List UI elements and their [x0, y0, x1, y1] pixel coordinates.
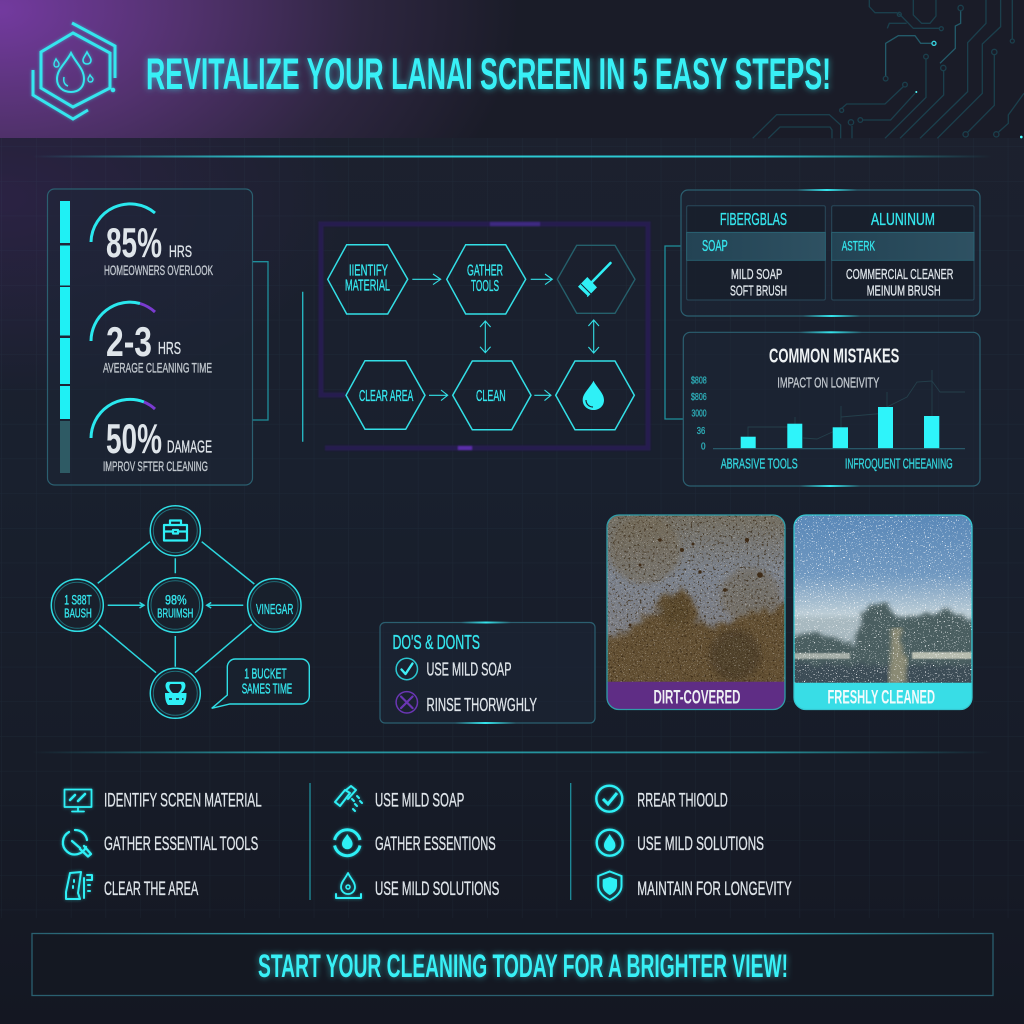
- table column: aluminum: ASTERK: [842, 238, 875, 254]
- bars: [741, 407, 939, 448]
- stat: 50 percent: IMPROV SFTER CLEANING: [103, 458, 208, 474]
- caption text: dirt-covered: DIRT-COVERED: [654, 687, 740, 708]
- node: soft brush: BAUSH: [64, 606, 92, 620]
- checklist column 2: [335, 786, 499, 900]
- icon: hexagon with water drops: [33, 23, 115, 119]
- stat: 85 percent: [91, 204, 213, 278]
- step: clean: [453, 361, 531, 430]
- stat: 2-3 hours: [91, 302, 212, 376]
- node: vinegar: VINEGAR: [256, 601, 293, 618]
- table column: fiberglass: SOAP: [702, 238, 728, 255]
- caption text: freshly cleaned: FRESHLY CLEANED: [828, 687, 935, 708]
- checklist column 3: [596, 786, 792, 900]
- step: water drop icon: [556, 361, 634, 430]
- icon: drop on tray: [336, 873, 361, 898]
- header banner: [0, 0, 1024, 138]
- node: center brush: [148, 578, 203, 632]
- connector bracket to right panels: [665, 246, 683, 419]
- segmented progress bar: [60, 201, 70, 473]
- x axis: [713, 448, 965, 450]
- do item: USE MILD SOAP: [426, 660, 512, 680]
- item: gather essential tools: GATHER ESSENTIAL TOOLS: [104, 833, 258, 855]
- column divider 1: [309, 783, 311, 900]
- table column: aluminum: ALUNINUM: [871, 209, 935, 229]
- column divider 2: [570, 783, 572, 900]
- photo: freshly cleaned screen: [785, 515, 980, 710]
- icon: circled drop: [335, 830, 360, 856]
- stat: 50 percent: 50%: [106, 415, 162, 462]
- call to action banner: [32, 933, 993, 996]
- item: use mild solutions: USE MILD SOLUTIONS: [375, 878, 499, 900]
- table column: fiberglass: FIBERGBLAS: [720, 209, 787, 229]
- step: identify material: IIENTIFY: [349, 263, 388, 280]
- node: bucket: [150, 668, 200, 718]
- stat: 2-3 hours: HRS: [158, 338, 181, 358]
- step: identify material: MATERIAL: [345, 278, 390, 295]
- item: rear threshold: RREAR THIOOLD: [637, 790, 728, 812]
- caption band: freshly cleaned: [794, 683, 972, 710]
- callout: bucket saves time: [212, 659, 309, 708]
- stat: 85 percent: HOMEOWNERS OVERLOOK: [104, 262, 213, 278]
- item: clear the area: CLEAR THE AREA: [104, 878, 198, 900]
- step: clear area: [346, 361, 425, 429]
- connector bracket from stats panel: [253, 262, 268, 420]
- node: vinegar: [248, 579, 301, 632]
- y axis labels: 0: [701, 440, 706, 452]
- step: gather tools: [447, 245, 526, 314]
- icon: shower: [335, 786, 362, 811]
- table column: fiberglass: [687, 206, 825, 300]
- chart heading: COMMON MISTAKES: [769, 345, 899, 368]
- table column: fiberglass: SOFT BRUSH: [730, 284, 787, 300]
- flow arrows: [412, 274, 599, 401]
- icon: shield: [598, 872, 622, 900]
- item: gather essentials: GATHER ESSENTIONS: [375, 833, 496, 855]
- step: gather tools: GATHER: [467, 263, 503, 280]
- y axis labels: 3000: [692, 408, 707, 420]
- table column: aluminum: MEINUM BRUSH: [867, 284, 941, 300]
- trend line: [748, 370, 965, 439]
- panel: key statistics: [48, 189, 252, 485]
- chart subtitle: IMPACT ON LONEIVITY: [777, 376, 880, 392]
- item: use mild soap: USE MILD SOAP: [375, 790, 464, 812]
- photo: dirt-covered screen: [606, 514, 786, 710]
- stat: 85 percent: 85%: [106, 219, 162, 266]
- process flow diagram: [321, 224, 648, 448]
- circuit board decoration: [753, 0, 1024, 138]
- caption band: dirt-covered: [607, 682, 785, 710]
- don't item: RINSE THORWGHLY: [426, 695, 537, 715]
- step: identify material: [328, 245, 408, 314]
- tools network diagram: [51, 506, 309, 718]
- x axis labels: ABRASIVE TOOLS: [721, 456, 798, 472]
- stat: 50 percent: DAMAGE: [167, 436, 212, 456]
- icon: circled check: [596, 786, 622, 812]
- node: soft brush: 1 S88T: [64, 592, 92, 607]
- icon: check: [396, 658, 417, 680]
- icon: circled drop: [597, 830, 623, 856]
- purple frame: [321, 224, 648, 448]
- network links: [98, 542, 254, 673]
- panel: common mistakes chart: [683, 331, 980, 487]
- node: center brush: BRUIMSH: [157, 606, 193, 620]
- stat: 2-3 hours: 2-3: [106, 318, 152, 365]
- stat: 2-3 hours: AVERAGE CLEANING TIME: [103, 360, 212, 376]
- step: clear area: CLEAR AREA: [359, 388, 414, 405]
- step: brush icon: [557, 245, 635, 313]
- panel: do's and don'ts: [380, 622, 595, 724]
- y axis labels: $808: [691, 374, 707, 386]
- step: clean: CLEAN: [476, 388, 506, 405]
- node: center brush: 98%: [165, 591, 187, 607]
- stat: 50 percent: [91, 399, 212, 474]
- table column: aluminum: [832, 206, 974, 300]
- section divider line: [32, 752, 992, 753]
- step: gather tools: TOOLS: [471, 278, 499, 295]
- icon: cross: [396, 692, 417, 713]
- item: use mild solutions: USE MILD SOLUTIONS: [637, 833, 764, 855]
- table column: aluminum: COMMERCIAL CLEANER: [846, 267, 953, 283]
- vertical connector line: [302, 292, 304, 442]
- heading: DO'S & DONTS: [392, 631, 480, 654]
- panel: material comparison table: [681, 189, 980, 317]
- stat: 85 percent: HRS: [169, 243, 192, 261]
- icon: magnifier: [63, 830, 91, 856]
- y axis labels: $806: [691, 391, 707, 403]
- item: identify screen material: IDENTIFY SCREN MATERIAL: [104, 790, 262, 812]
- icon: monitor: [64, 790, 92, 812]
- icon: cleaning tools: [66, 872, 92, 899]
- y axis labels: 36: [697, 425, 705, 437]
- callout: bucket saves time: SAMES TIME: [242, 681, 292, 697]
- y axis labels: [691, 374, 707, 452]
- header divider line: [32, 156, 992, 158]
- table column: fiberglass: MILD SOAP: [731, 267, 782, 283]
- node: soft brush: [51, 579, 103, 631]
- item: maintain for longevity: MAINTAIN FOR LONGEVITY: [637, 878, 792, 900]
- checklist column 1: [63, 790, 262, 900]
- callout: bucket saves time: 1 BUCKET: [244, 666, 287, 682]
- node: briefcase: [150, 506, 200, 556]
